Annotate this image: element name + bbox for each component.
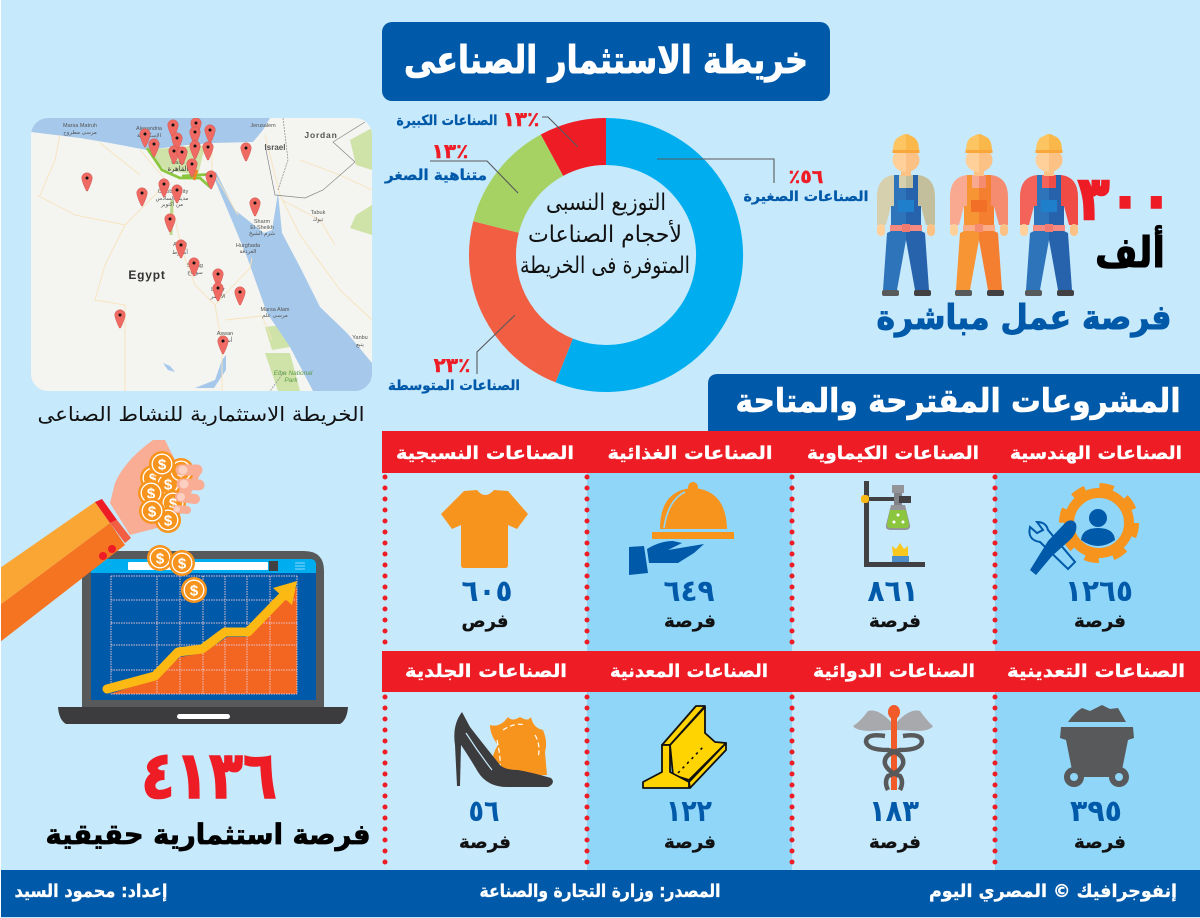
panel: investment map: القاهرة bbox=[168, 165, 189, 173]
counts: top row: ٨٦١ bbox=[868, 574, 918, 609]
panel: investment map: Alexandria bbox=[136, 126, 163, 132]
panel: top industries row header: الصناعات الهندسية bbox=[1010, 443, 1182, 464]
map labels: Marsa Matruh bbox=[63, 123, 97, 129]
footer bar: إنفوجرافيك © المصري اليوم bbox=[929, 881, 1177, 902]
unit labels: bottom row: فرصة bbox=[459, 832, 511, 853]
highways bbox=[147, 148, 215, 187]
panel: investment map: أسوان bbox=[218, 336, 233, 344]
panel: investment map: Jordan bbox=[304, 130, 338, 140]
panel: bottom industries row header: الصناعات الجلدية bbox=[405, 661, 567, 682]
donut centre text bbox=[520, 190, 690, 279]
donut centre text: التوزيع النسبى bbox=[546, 190, 666, 216]
panel: investment map: Elba National bbox=[274, 370, 313, 377]
counts: top row: ١٢٦٥ bbox=[1065, 574, 1133, 609]
counts: bottom row: ٣٩٥ bbox=[1070, 794, 1122, 829]
unit labels: top row: فرصة bbox=[869, 611, 921, 632]
counts: top row bbox=[462, 574, 1133, 609]
illustration: laptop with growth chart bbox=[58, 551, 348, 724]
panel: investment map: تبوك bbox=[313, 217, 324, 223]
panel: top industries row header: الصناعات النسيجية bbox=[396, 443, 574, 464]
worker: left bbox=[877, 134, 935, 296]
label: micro industries 13%: ٪١٣ bbox=[432, 139, 468, 163]
panel: bottom industries row header: الصناعات المعدنية bbox=[610, 661, 768, 682]
borders bbox=[265, 118, 365, 391]
workers illustration bbox=[877, 134, 1078, 296]
footer bar: المصدر: وزارة التجارة والصناعة bbox=[480, 881, 720, 902]
stat: 300 thousand direct jobs: ٣٠٠ bbox=[1078, 164, 1172, 234]
panel: top industries row header bbox=[382, 431, 1200, 473]
stat: 300 thousand direct jobs bbox=[876, 164, 1172, 338]
panel: investment map: من أكتوبر bbox=[160, 200, 183, 208]
panel: investment map: Cairo bbox=[171, 160, 185, 166]
icon: gear with person and tools bbox=[1029, 487, 1135, 575]
panel: bottom industries row header bbox=[382, 651, 1200, 692]
panel: investment map: Jerusalem bbox=[250, 123, 276, 129]
panel: investment map: مدينة السادس bbox=[156, 196, 188, 202]
panel: bottom industries row header: الصناعات الدوائية bbox=[813, 661, 975, 682]
unit labels: top row bbox=[462, 611, 1126, 632]
panel: investment map: Marsa Alam bbox=[260, 307, 290, 313]
unit labels: bottom row: فرصة bbox=[1074, 832, 1126, 853]
panel: investment map: Sohag bbox=[187, 263, 203, 269]
section banner: proposed projects bbox=[708, 374, 1200, 431]
panel: top industries row header: الصناعات الكيماوية bbox=[807, 443, 979, 464]
stat: 4136 investment opportunities: فرصة استثمارية حقيقية bbox=[46, 818, 370, 851]
panel: investment map: Hurghada bbox=[236, 243, 261, 249]
donut centre text: لأحجام الصناعات bbox=[528, 220, 682, 248]
growth arrow bbox=[107, 581, 297, 689]
stat: 300 thousand direct jobs: ألف bbox=[1095, 225, 1165, 277]
panel: investment map: الإسكندرية bbox=[137, 132, 161, 139]
worker: middle bbox=[950, 134, 1008, 296]
panel: investment map: سوهاج bbox=[187, 270, 203, 276]
label: large industries 13%: ٪١٣ bbox=[503, 107, 539, 131]
panel: investment map: Israel bbox=[265, 143, 285, 152]
counts: top row: ٦٠٥ bbox=[462, 574, 512, 609]
stat: 4136 investment opportunities: ٤١٣٦ bbox=[141, 737, 277, 814]
panel: investment map: مرسى علم bbox=[262, 313, 288, 319]
panel: investment map: El-Sheikh bbox=[250, 225, 274, 231]
icon: coal cart bbox=[1060, 705, 1134, 787]
label: micro industries 13%: متناهية الصغر bbox=[384, 166, 487, 184]
label: medium industries 23% bbox=[388, 353, 520, 394]
unit labels: top row: فرصة bbox=[1074, 611, 1126, 632]
illustration: arm and coins bbox=[0, 440, 207, 642]
icon: high heel and leather bbox=[454, 712, 553, 787]
counts: top row: ٦٤٩ bbox=[664, 574, 714, 609]
panel: investment map: Egypt bbox=[128, 268, 166, 282]
column shading bbox=[587, 473, 1200, 870]
icon: flask on stand bbox=[861, 481, 925, 567]
panel: investment map: ينبع bbox=[356, 342, 364, 348]
panel: investment map: Yanbu bbox=[352, 335, 368, 341]
green parks bbox=[147, 128, 372, 391]
label: large industries 13%: الصناعات الكبيرة bbox=[396, 113, 498, 129]
label: micro industries 13% bbox=[384, 139, 487, 184]
label: small industries 56%: ٥٦٪ bbox=[789, 166, 823, 188]
panel: investment map: أسيوط bbox=[172, 248, 188, 256]
panel: investment map: Aswan bbox=[217, 331, 233, 337]
panel: investment map: الأقصر bbox=[209, 292, 226, 300]
unit labels: top row: فرص bbox=[462, 611, 508, 632]
map caption: الخريطة الاستثمارية للنشاط الصناعى bbox=[38, 402, 364, 426]
icon: serving dish and hand bbox=[629, 482, 734, 575]
label: small industries 56%: الصناعات الصغيرة bbox=[744, 189, 868, 205]
counts: bottom row bbox=[468, 794, 1122, 829]
icon: steel beam bbox=[643, 706, 726, 788]
icon: t-shirt bbox=[441, 490, 528, 568]
panel: investment map: October City bbox=[158, 189, 189, 195]
chart area bbox=[110, 587, 297, 694]
panel: investment map: Luxor bbox=[211, 287, 225, 293]
counts: bottom row: ٥٦ bbox=[468, 794, 500, 829]
map pins bbox=[82, 118, 260, 354]
panel: investment map: الغردقة bbox=[240, 249, 257, 255]
panel: investment map: Tabuk bbox=[311, 210, 326, 216]
label: large industries 13% bbox=[396, 107, 539, 131]
panel: investment map: Sharm bbox=[254, 219, 271, 225]
stat: 300 thousand direct jobs: فرصة عمل مباشرة bbox=[876, 298, 1172, 338]
panel: investment map: Park bbox=[284, 377, 298, 384]
unit labels: bottom row: فرصة bbox=[664, 832, 716, 853]
stat: 4136 investment opportunities bbox=[46, 737, 370, 851]
unit labels: top row: فرصة bbox=[664, 611, 716, 632]
donut chart bbox=[492, 141, 720, 368]
footer bar bbox=[0, 870, 1200, 917]
panel: investment map bbox=[31, 118, 372, 391]
icon: caduceus bbox=[853, 705, 933, 790]
panel: investment map: Asyut bbox=[173, 242, 187, 248]
counts: bottom row: ١٢٢ bbox=[666, 794, 712, 829]
sea bbox=[31, 118, 270, 150]
panel: bottom industries row header: الصناعات التعدينية bbox=[1007, 661, 1185, 682]
worker: right bbox=[1020, 134, 1078, 296]
unit labels: bottom row: فرصة bbox=[869, 832, 921, 853]
label: small industries 56% bbox=[744, 166, 868, 205]
unit labels: bottom row bbox=[459, 832, 1126, 853]
panel: investment map: شرم الشيخ bbox=[249, 231, 275, 237]
donut centre text: المتوفرة فى الخريطة bbox=[520, 253, 690, 279]
panel: top industries row header: الصناعات الغذائية bbox=[608, 443, 772, 464]
counts: bottom row: ١٨٣ bbox=[869, 794, 919, 829]
title banner: خريطة الاستثمار الصناعى bbox=[404, 38, 808, 82]
label: medium industries 23%: الصناعات المتوسطة bbox=[388, 378, 520, 394]
title banner bbox=[382, 22, 830, 101]
label: medium industries 23%: ٪٢٣ bbox=[434, 353, 470, 377]
donut leader lines bbox=[430, 117, 774, 374]
red dotted separators bbox=[385, 477, 995, 868]
panel: investment map: مرسى مطروح bbox=[63, 130, 97, 136]
footer bar: إعداد: محمود السيد bbox=[14, 881, 168, 902]
roads bbox=[37, 135, 372, 391]
